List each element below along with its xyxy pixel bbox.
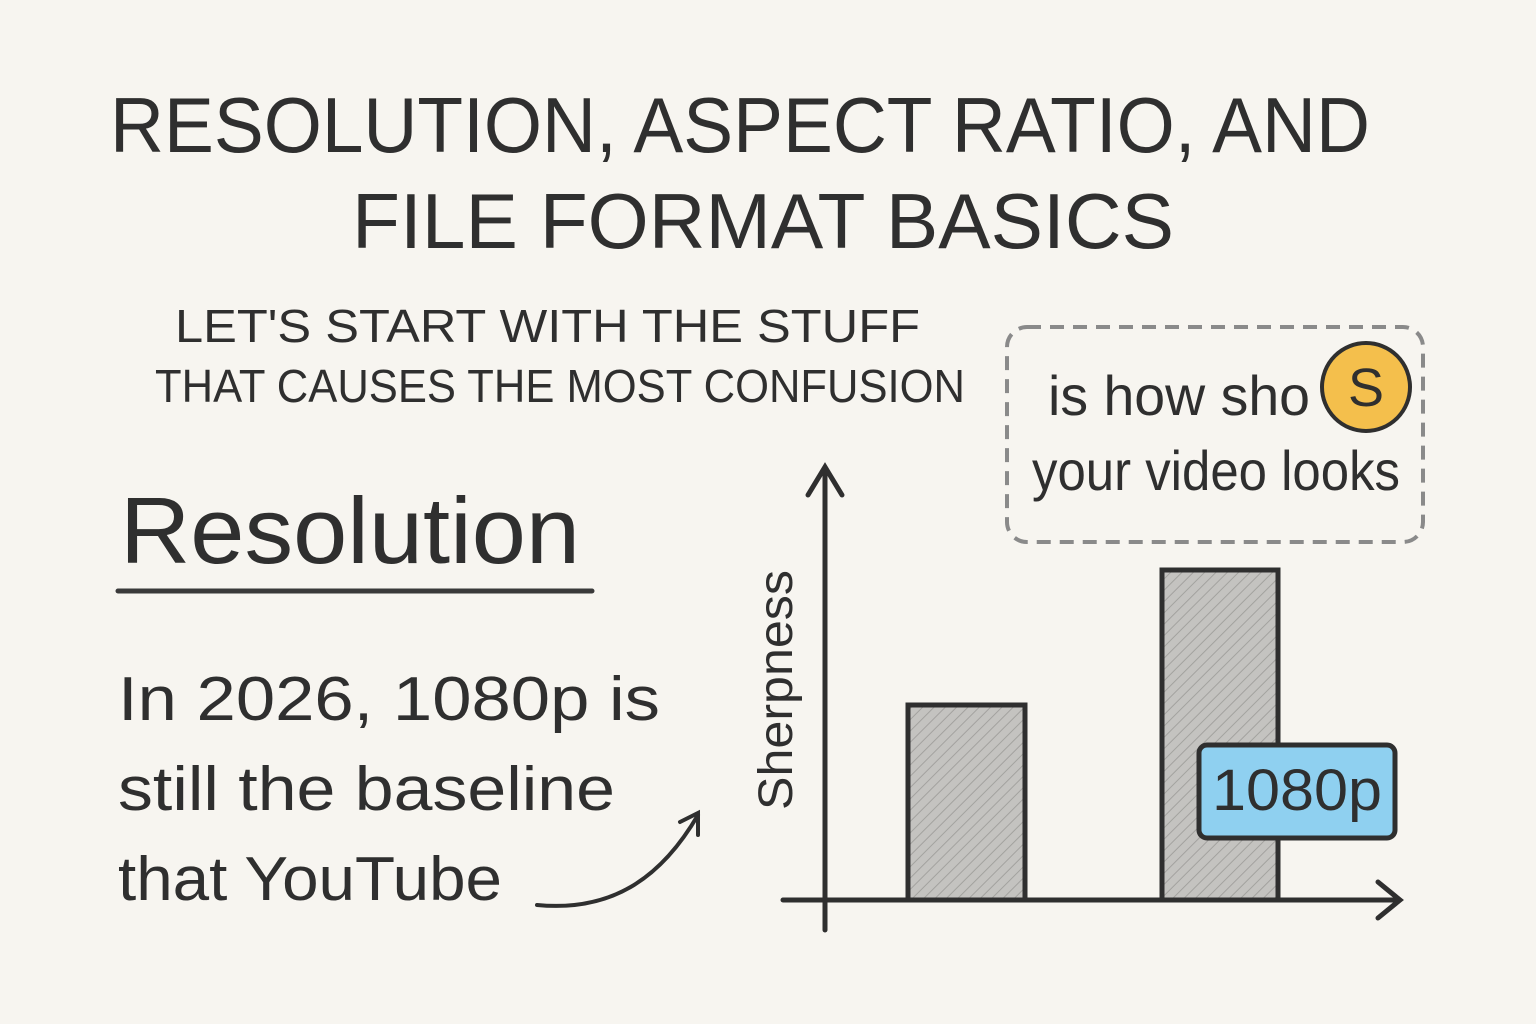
title bbox=[110, 81, 1370, 265]
label: 1080p bbox=[1199, 745, 1395, 838]
icon: yellow S circle bbox=[1322, 343, 1410, 431]
body text: still the baseline bbox=[118, 755, 615, 824]
body text: In 2026, 1080p is bbox=[118, 665, 660, 734]
body text: that YouTube bbox=[118, 845, 502, 914]
bar chart bbox=[750, 467, 1400, 930]
axes bbox=[783, 467, 1400, 930]
icon: yellow S circle: S bbox=[1348, 358, 1384, 418]
heading: Resolution: Resolution bbox=[120, 478, 580, 583]
label: 1080p: 1080p bbox=[1212, 758, 1382, 823]
body text bbox=[118, 665, 660, 914]
arrow: curved to chart bbox=[537, 813, 698, 906]
title: RESOLUTION, ASPECT RATIO, AND bbox=[110, 81, 1370, 169]
title: FILE FORMAT BASICS bbox=[352, 177, 1174, 265]
callout: is how sho bbox=[1048, 364, 1310, 427]
bar: right bbox=[1162, 570, 1278, 900]
subtitle bbox=[155, 300, 965, 412]
y axis label: Sherpness bbox=[750, 570, 803, 810]
callout bbox=[1007, 327, 1423, 542]
subtitle: LET'S START WITH THE STUFF bbox=[175, 300, 920, 352]
subtitle: THAT CAUSES THE MOST CONFUSION bbox=[155, 360, 965, 412]
callout: your video looks bbox=[1032, 439, 1400, 502]
bar: left bbox=[908, 705, 1025, 900]
